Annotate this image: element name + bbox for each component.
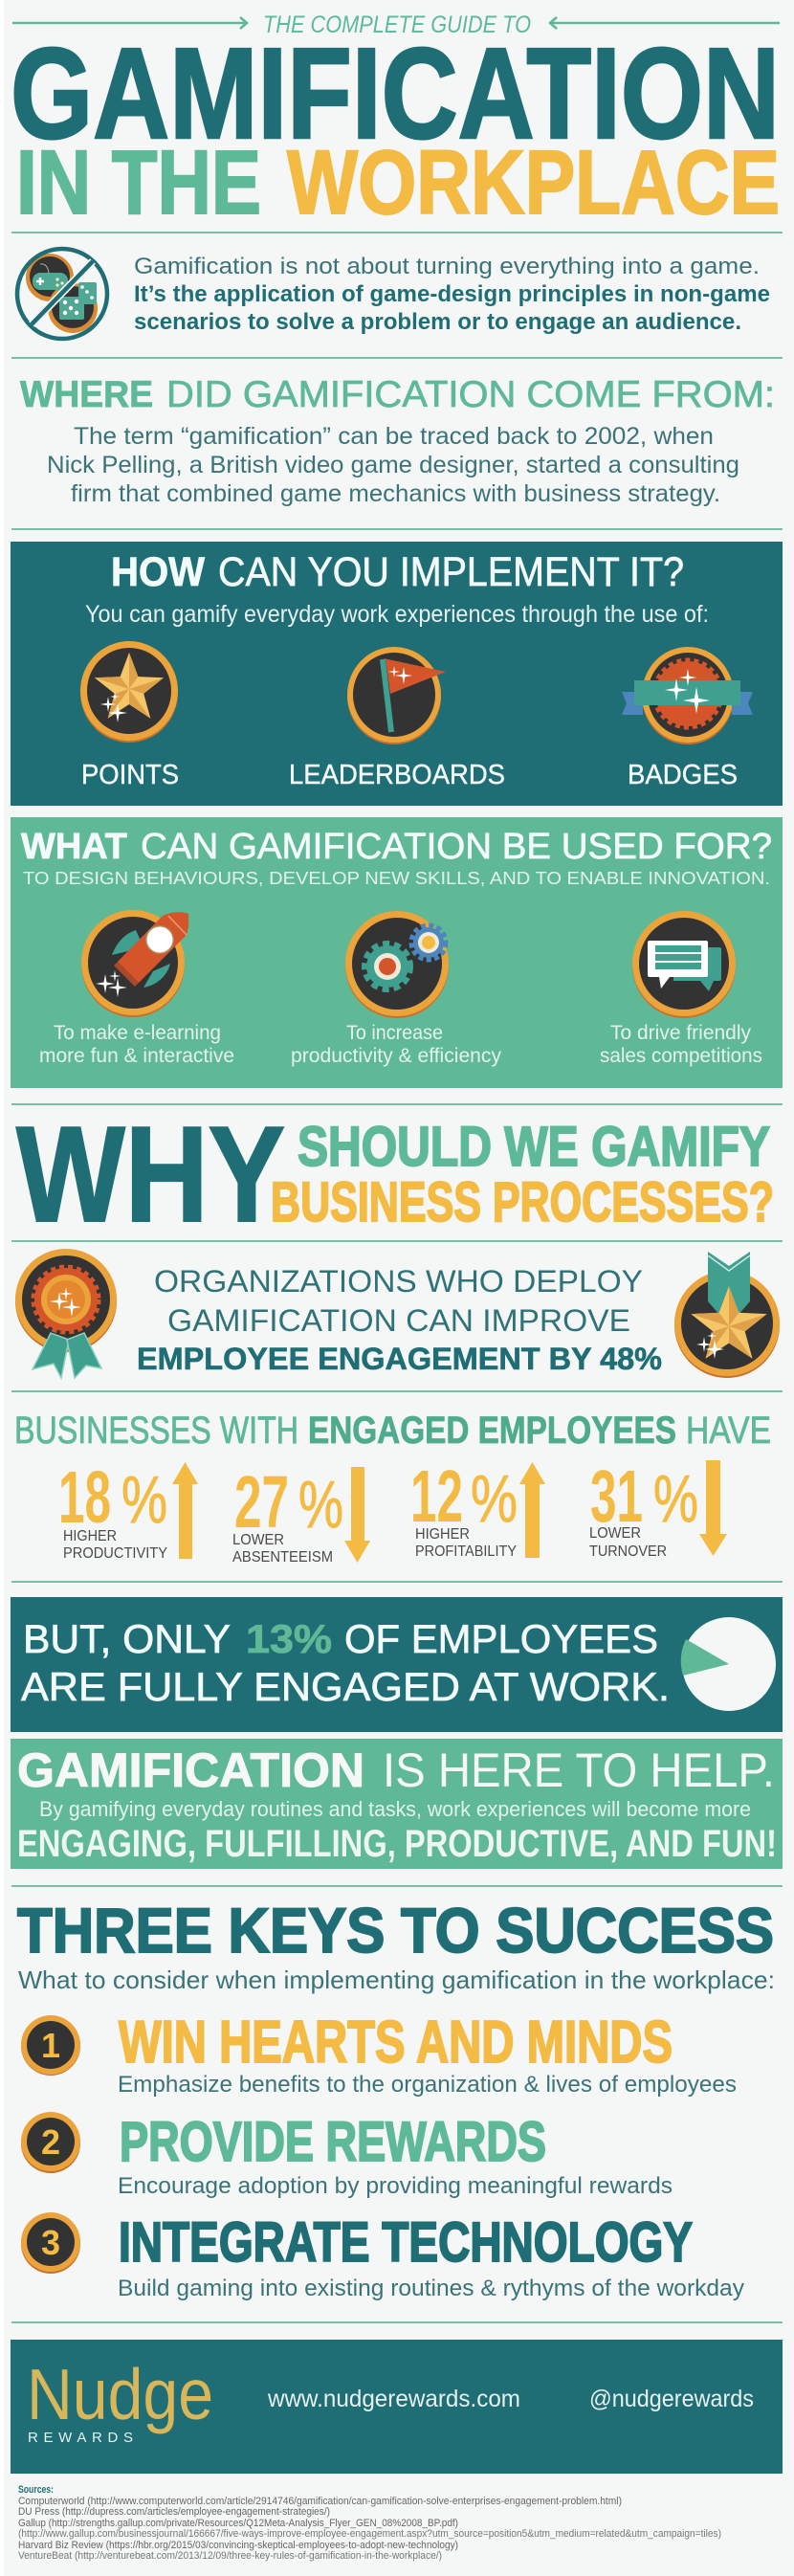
- stat: 18% higher productivity: [58, 1456, 198, 1562]
- origin text: firm that combined game mechanics with business strategy.: [71, 480, 720, 507]
- stat: 27% lower absenteeism: %: [298, 1467, 343, 1542]
- heading: businesses with engaged employees have: ENGAGED EMPLOYEES: [308, 1410, 676, 1452]
- icon: chat: [632, 911, 736, 1018]
- stat: 12% higher profitability: HIGHER: [415, 1526, 470, 1543]
- key text: Build gaming into existing routines & rythyms of the workday: [118, 2276, 744, 2301]
- number badge 3: 3: [41, 2223, 60, 2262]
- title: in the workplace: [16, 132, 780, 233]
- stat: 27% lower absenteeism: [232, 1461, 370, 1566]
- origin text: Nick Pelling, a British video game designer, started a consulting: [47, 452, 739, 478]
- sources: Sources:: [18, 2484, 54, 2496]
- icon: rosette medal: [15, 1249, 117, 1378]
- stat: 31% lower turnover: [589, 1455, 727, 1560]
- caption: productivity: [291, 1022, 501, 1067]
- caption: e-learning: To make e-learning: [54, 1022, 221, 1044]
- heading: IS HERE TO HELP.: [383, 1743, 775, 1797]
- heading: how: HOW: [111, 549, 205, 595]
- icon: badges ribbon: [622, 647, 753, 744]
- caption: sales: To drive friendly: [610, 1022, 751, 1044]
- statement text: BUT, ONLY: [23, 1616, 231, 1661]
- stat: 12% higher profitability: PROFITABILITY: [415, 1543, 517, 1560]
- twitter handle: @nudgerewards: [589, 2386, 754, 2412]
- heading: businesses with engaged employees have: BUSINESSES WITH: [14, 1410, 298, 1452]
- icon: gears: [345, 911, 449, 1018]
- engagement stat text: ORGANIZATIONS WHO DEPLOY: [154, 1264, 643, 1299]
- number badge 2: 2: [41, 2122, 60, 2162]
- key 1: [21, 2010, 737, 2098]
- caption: sales: sales competitions: [600, 1045, 762, 1067]
- label: points: POINTS: [81, 760, 179, 790]
- heading: where did gamification come from: WHERE: [20, 374, 153, 415]
- origin text: [47, 423, 739, 507]
- stat: 27% lower absenteeism: LOWER: [232, 1532, 284, 1548]
- icon: star medal: [674, 1252, 780, 1378]
- stat: 18% higher productivity: PRODUCTIVITY: [63, 1545, 167, 1562]
- pie chart: 13%: [681, 1617, 776, 1711]
- logo: nudge rewards: REWARDS: [28, 2430, 133, 2446]
- panel: only 13% fully engaged: [11, 1597, 783, 1732]
- sources: VentureBeat (http://venturebeat.com/2013/12/09/three-key-rules-of-gamification-in-the-workplace/): [18, 2550, 442, 2562]
- sources: DU Press (http://dupress.com/articles/employee-engagement-strategies/): [18, 2506, 330, 2518]
- caption: sales: [600, 1022, 762, 1067]
- heading: [17, 1743, 775, 1797]
- statement text: [21, 1616, 670, 1709]
- label: badges: BADGES: [628, 760, 738, 790]
- heading: why should we gamify business processes: WHY: [16, 1099, 285, 1251]
- number badge 3: [21, 2212, 80, 2274]
- key text: Encourage adoption by providing meaningful rewards: [118, 2173, 673, 2199]
- panel: footer: [11, 2340, 783, 2474]
- heading: why should we gamify business processes: [16, 1099, 774, 1251]
- heading: businesses with engaged employees have: HAVE: [686, 1410, 771, 1452]
- origin text: The term “gamification” can be traced back to 2002, when: [74, 423, 714, 450]
- subheading: You can gamify everyday work experiences through the use of:: [85, 601, 709, 628]
- icon: rocket: [81, 910, 188, 1017]
- stat: 18% higher productivity: 18: [58, 1456, 111, 1539]
- subheading: TO DESIGN BEHAVIOURS, DEVELOP NEW SKILLS, AND TO ENABLE INNOVATION.: [23, 869, 770, 888]
- stat: 31% lower turnover: 31: [590, 1455, 643, 1538]
- heading: businesses with engaged employees have: [14, 1410, 771, 1452]
- heading: GAMIFICATION: [17, 1743, 364, 1797]
- stat: 18% higher productivity: HIGHER: [63, 1528, 117, 1544]
- sources: [18, 2484, 721, 2562]
- sources: Harvard Biz Review (https://hbr.org/2015/03/convincing-skeptical-employees-to-adopt-new-technology): [18, 2540, 458, 2551]
- heading: what: CAN GAMIFICATION BE USED FOR?: [141, 827, 772, 867]
- label: leaderboards: LEADERBOARDS: [289, 760, 505, 790]
- stat: 12% higher profitability: 12: [410, 1455, 463, 1538]
- stat: 18% higher productivity: %: [121, 1462, 167, 1537]
- sources: Gallup (http://strengths.gallup.com/private/Resources/Q12Meta-Analysis_Flyer_GEN_08%2008_BP.pdf): [18, 2518, 458, 2529]
- stat: 31% lower turnover: TURNOVER: [589, 1543, 667, 1560]
- intro text: [134, 254, 770, 335]
- icon: leaderboards flag: [347, 647, 446, 744]
- caption: productivity: To increase: [346, 1022, 443, 1044]
- caption: productivity: productivity & efficiency: [291, 1045, 501, 1067]
- header: the complete guide to: [12, 11, 780, 38]
- key text: Emphasize benefits to the organization & lives of employees: [118, 2072, 737, 2098]
- panel: gamification is here to help: [11, 1739, 783, 1869]
- statement text: 13%: [246, 1616, 332, 1661]
- title: in the workplace: IN THE: [16, 132, 261, 233]
- icon: no games: [17, 249, 107, 339]
- engagement stat text: [137, 1264, 662, 1376]
- heading: what: WHAT: [21, 827, 127, 867]
- engagement stat text: EMPLOYEE ENGAGEMENT BY 48%: [137, 1342, 662, 1376]
- icon: points star: [80, 641, 178, 743]
- intro text: scenarios to solve a problem or to engage an audience.: [134, 309, 741, 335]
- heading: how: CAN YOU IMPLEMENT IT?: [218, 549, 684, 595]
- panel: what can gamification be used for: [11, 817, 783, 1088]
- header: the complete guide to: THE COMPLETE GUIDE TO: [263, 11, 531, 38]
- sources: Computerworld (http://www.computerworld.com/article/2914746/gamification/can-gamification-solve-enterprises-engagement-problem.html): [18, 2496, 622, 2507]
- engagement stat text: GAMIFICATION CAN IMPROVE: [167, 1303, 630, 1338]
- panel: how can you implement it: [11, 542, 783, 806]
- caption: e-learning: [39, 1022, 234, 1067]
- stat: 31% lower turnover: LOWER: [589, 1525, 641, 1542]
- statement text: OF EMPLOYEES: [344, 1616, 658, 1661]
- stat: 12% higher profitability: %: [471, 1461, 518, 1536]
- key title: PROVIDE REWARDS: [120, 2111, 546, 2173]
- logo: nudge rewards: Nudge: [27, 2354, 213, 2434]
- number badge 2: [21, 2112, 80, 2173]
- stat: 31% lower turnover: %: [653, 1461, 698, 1536]
- body text: By gamifying everyday routines and tasks, work experiences will become more: [39, 1797, 751, 1821]
- statement text: ARE FULLY ENGAGED AT WORK.: [21, 1664, 670, 1709]
- sources: (http://www.gallup.com/businessjournal/166667/five-ways-improve-employee-engagement.aspx?utm_source=position5&utm_medium=related&utm_campaign=tiles): [18, 2528, 721, 2540]
- number badge 1: [21, 2015, 80, 2076]
- stat: 27% lower absenteeism: 27: [234, 1461, 289, 1543]
- subheading: What to consider when implementing gamification in the workplace:: [18, 1965, 775, 1994]
- heading: where did gamification come from: DID GAMIFICATION COME FROM:: [166, 374, 775, 415]
- intro text: It’s the application of game-design principles in non-game: [134, 281, 770, 307]
- key 3: [21, 2211, 744, 2301]
- stat: 27% lower absenteeism: ABSENTEEISM: [232, 1549, 333, 1566]
- intro text: Gamification is not about turning everything into a game.: [134, 254, 760, 279]
- key 2: [21, 2111, 673, 2199]
- number badge 1: 1: [41, 2026, 60, 2065]
- stat: 12% higher profitability: [410, 1455, 545, 1560]
- website: www.nudgerewards.com: [267, 2386, 520, 2412]
- caption: e-learning: more fun & interactive: [39, 1045, 234, 1067]
